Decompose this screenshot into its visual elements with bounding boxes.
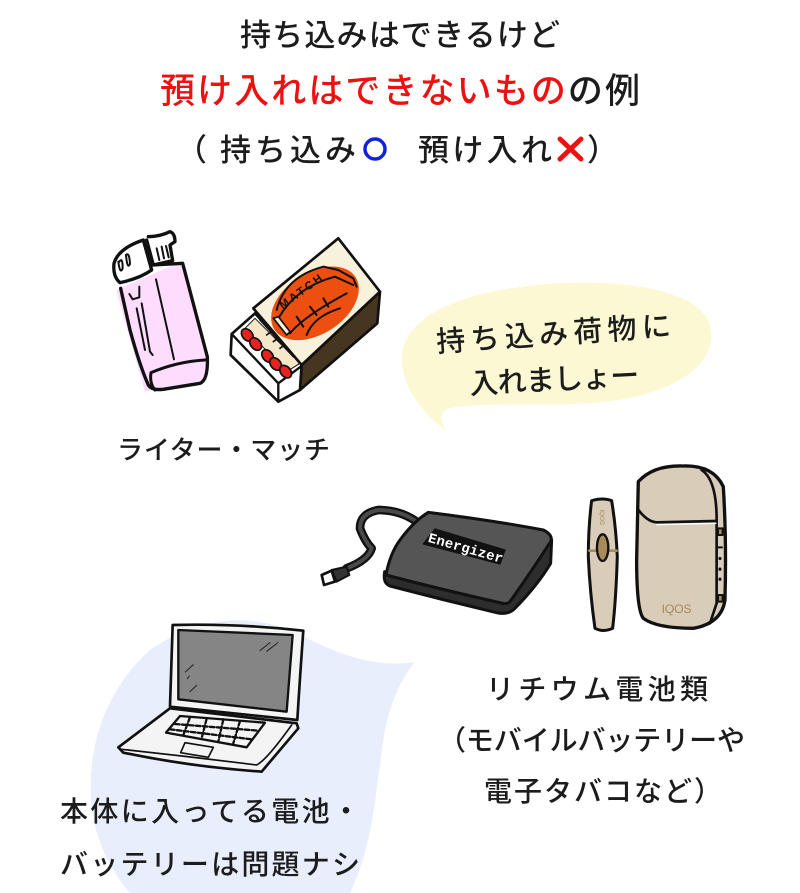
icon: power bank	[322, 510, 552, 613]
label: lithium batteries: （モバイルバッテリーや	[438, 725, 745, 756]
icon: IQOS holder: IQOS	[598, 509, 605, 525]
label: lithium batteries: リチウム電池類	[486, 674, 708, 705]
icon: matchbox: MATCH	[277, 273, 325, 312]
cable	[347, 510, 417, 568]
label: lithium batteries	[438, 674, 745, 807]
icon: lighter	[114, 232, 207, 392]
callout: yellow speech bubble: 持ち込み荷物に	[435, 310, 672, 359]
icon: power bank: Energizer	[426, 531, 505, 568]
label: built-in batteries: バッテリーは問題ナシ	[60, 849, 360, 880]
icon: IQOS charger	[637, 466, 726, 628]
title: 持ち込み	[220, 133, 356, 168]
callout: yellow speech bubble: 入れましょー	[469, 360, 640, 401]
icon: IQOS holder	[588, 499, 617, 630]
label: built-in batteries	[60, 796, 360, 880]
title: ）	[587, 133, 618, 168]
label: built-in batteries: 本体に入ってる電池・	[60, 796, 360, 827]
label: lithium batteries: 電子タバコなど）	[484, 776, 722, 807]
label: lighter and matches: ライター・マッチ	[117, 435, 330, 465]
title: 預け入れはできないものの例	[160, 72, 640, 111]
icon: IQOS charger: IQOS	[662, 602, 692, 616]
title: 預け入れ	[418, 133, 552, 168]
callout: yellow speech bubble	[402, 283, 711, 432]
icon: laptop	[118, 625, 303, 772]
title	[160, 18, 640, 168]
title: 持ち込みはできるけど	[240, 18, 560, 53]
callout: blue bubble	[91, 620, 415, 893]
icon: matchbox	[231, 238, 380, 402]
title: （	[176, 133, 207, 168]
